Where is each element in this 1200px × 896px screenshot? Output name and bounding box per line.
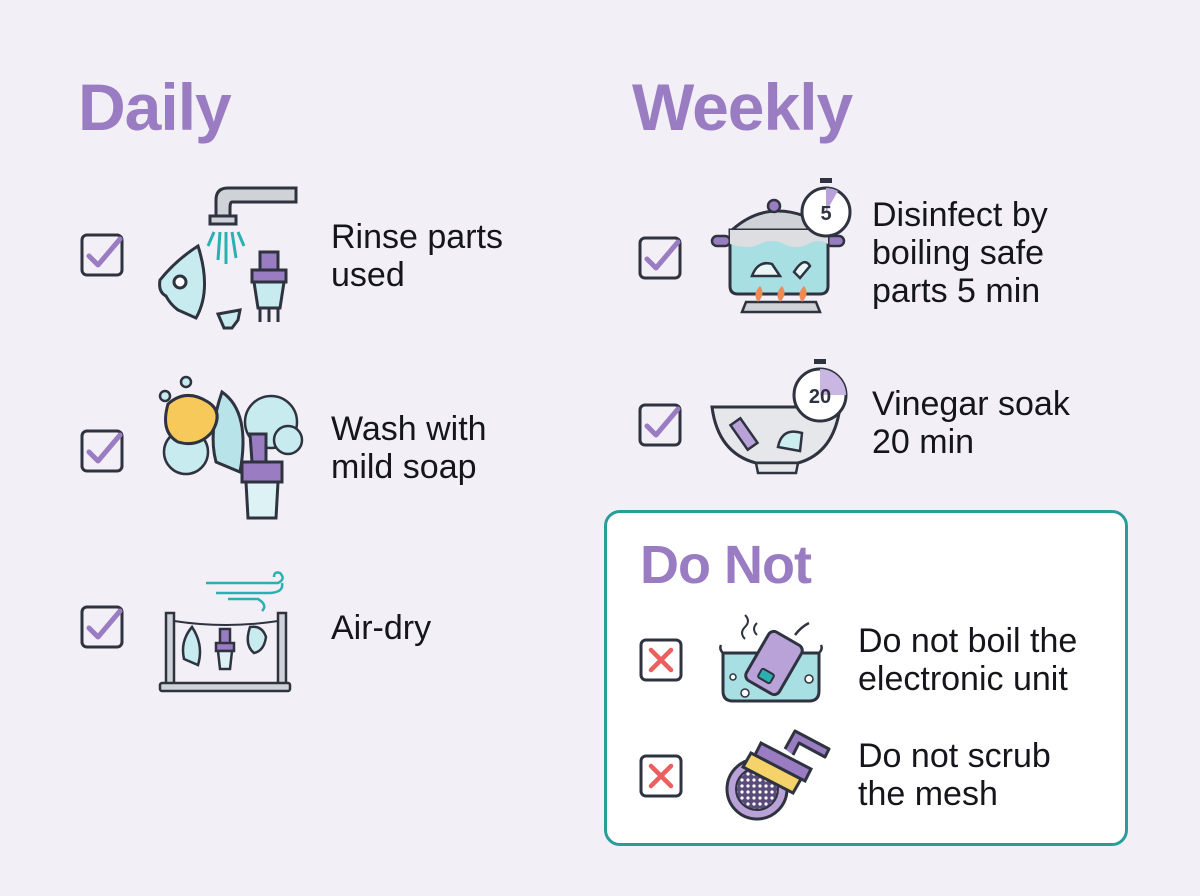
text: the mesh: [858, 775, 998, 813]
checkbox: [638, 404, 682, 446]
text: mild soap: [331, 448, 477, 486]
text: [331, 410, 487, 486]
text: 20 min: [872, 423, 974, 461]
row: do not boil: [640, 614, 1077, 702]
text: [872, 385, 1070, 461]
panel: Do Not: [604, 510, 1128, 846]
checkbox: [80, 606, 124, 648]
text: electronic unit: [858, 660, 1068, 698]
icon: pot with timer: 5: [820, 203, 832, 225]
heading: Do Not: Do Not: [640, 535, 811, 595]
icon: sponge and foam: [158, 376, 304, 520]
text: [331, 218, 503, 294]
text: used: [331, 256, 405, 294]
icon: pot with timer: [710, 178, 852, 314]
row: vinegar soak: [638, 359, 1070, 474]
checkbox: [80, 234, 124, 276]
text: boiling safe: [872, 234, 1044, 272]
checkbox: [80, 430, 124, 472]
title: Daily: Daily: [78, 70, 231, 144]
x box: [640, 754, 682, 798]
text: [872, 196, 1048, 310]
text: Vinegar soak: [872, 385, 1070, 423]
text: [858, 622, 1077, 698]
text: Do not boil the: [858, 622, 1077, 660]
row: wash with soap: [80, 376, 487, 520]
text: [858, 737, 1051, 813]
row: rinse parts: [80, 186, 503, 330]
text: Air-dry: [331, 609, 431, 647]
row: do not scrub: [640, 729, 1051, 820]
row: air-dry: [80, 571, 431, 692]
checkbox: [638, 236, 682, 280]
icon: brush and mesh: [726, 729, 831, 820]
icon: bowl with timer: 20: [809, 386, 831, 408]
title: Weekly: Weekly: [632, 70, 852, 144]
x box: [640, 638, 682, 682]
icon: device in water: [719, 614, 823, 702]
icon: bowl with timer: [710, 359, 848, 474]
icon: drying rack: [158, 571, 292, 692]
text: Wash with: [331, 410, 487, 448]
row: boiling: [638, 178, 1048, 314]
text: Do not scrub: [858, 737, 1051, 775]
icon: faucet and parts: [158, 186, 298, 330]
text: Disinfect by: [872, 196, 1048, 234]
text: Rinse parts: [331, 218, 503, 256]
text: parts 5 min: [872, 272, 1040, 310]
